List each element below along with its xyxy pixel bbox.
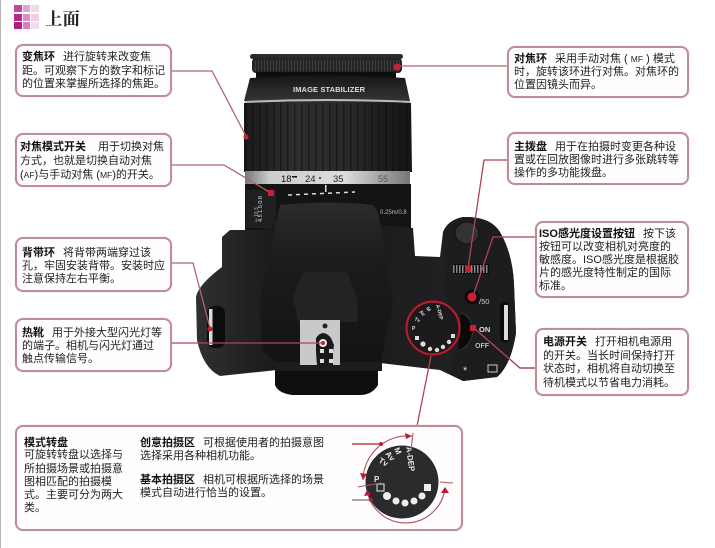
mode dial diagram: P	[374, 475, 380, 484]
panel: focus ring: 位置因镜头而异。	[514, 79, 602, 91]
mode dial diagram: A-DEP	[404, 446, 416, 473]
hot shoe	[300, 320, 340, 366]
eyepiece	[275, 362, 382, 395]
lens: 35	[333, 174, 344, 185]
mode dial on camera: P	[412, 326, 416, 332]
panel: power switch: 电源开关 打开相机电源用	[543, 336, 672, 348]
title: 上面	[45, 9, 80, 29]
text block: mode dial description: 模式转盘	[24, 437, 68, 449]
lens: 55	[378, 174, 388, 184]
text block: basic zone: 模式自动进行恰当的设置。	[140, 487, 272, 499]
dial disc	[366, 446, 438, 518]
leader line: focus ring	[394, 64, 507, 70]
panel: ISO button	[535, 221, 689, 298]
lens	[244, 54, 412, 232]
shutter and main dial: /50	[479, 297, 489, 306]
lens: ∞ 10 3	[254, 207, 260, 222]
text block: creative zone	[140, 436, 324, 462]
shutter and main dial: *	[463, 365, 468, 377]
panel: hot shoe	[15, 318, 172, 372]
bracket arcs and arrows	[358, 433, 453, 523]
panel: main dial	[507, 132, 689, 185]
panel: main dial: 主拨盘 用于在拍摄时变更各种设	[514, 141, 676, 153]
panel: zoom ring	[15, 44, 172, 97]
panel: ISO button: ISO感光度设置按钮 按下该	[539, 228, 676, 240]
text block: basic zone	[140, 474, 324, 499]
panel: focus mode switch: (AF)与手动对焦 (MF)的开关。	[20, 169, 160, 181]
lens: IMAGE STABILIZER	[293, 85, 366, 94]
shutter and main dial: OFF	[475, 343, 490, 350]
panel: ISO button: 片的感光度特性制定的国际	[539, 267, 671, 279]
panel: focus mode switch: 方式，也就是切换自动对焦	[20, 155, 152, 167]
panel: zoom ring: 的位置来掌握所选择的焦距。	[22, 78, 165, 90]
panel: strap mount: 孔，牢固安装背带。安装时应	[22, 260, 165, 272]
leader line: power switch	[470, 325, 535, 368]
text block: mode dial description: 式。主要可分为两大	[24, 489, 123, 501]
panel: hot shoe: 热靴 用于外接大型闪光灯等	[22, 327, 162, 339]
mode dial diagram: Av	[383, 450, 397, 463]
leader line: mode dial	[417, 356, 431, 426]
leader line: strap mount	[172, 263, 212, 332]
panel: main dial: 置或在回放图像时进行多张跳转等	[514, 154, 679, 166]
viewfinder prism	[260, 202, 393, 362]
icon: pink title grid	[14, 5, 39, 29]
panel: power switch: 状态时，相机将自动切换至	[543, 363, 675, 375]
panel: mode dial	[15, 425, 463, 531]
panel: power switch: 的开关。当长时间保持打开	[543, 350, 675, 362]
mode dial diagram: Tv	[377, 456, 390, 469]
lens: 0.25m/0.8	[380, 210, 407, 216]
mode dial on camera: A-DEP	[434, 304, 444, 321]
panel: strap mount: 注意保持左右平衡。	[22, 273, 121, 285]
text block: mode dial description	[24, 436, 123, 514]
lens: 4.5 1.5 0.8	[258, 196, 264, 222]
panel: focus ring: 对焦环 采用手动对焦 ( MF ) 模式	[514, 53, 675, 65]
panel: hot shoe: 触点传输信号。	[22, 353, 99, 365]
text block: mode dial description: 类。	[24, 502, 46, 514]
leader line: ISO button	[468, 237, 535, 302]
panel: focus ring: 时，旋转该环进行对焦。对焦环的	[514, 66, 679, 78]
panel: ISO button: 敏感度。ISO感光度是根据胶	[539, 254, 679, 266]
shutter and main dial	[207, 222, 509, 377]
mode dial on camera: Av	[418, 309, 426, 318]
mode dial on camera	[405, 300, 461, 356]
panel: main dial: 操作的多功能拨盘。	[514, 167, 613, 179]
panel: power switch	[535, 328, 689, 396]
panel: ISO button: 按钮可以改变相机对亮度的	[539, 241, 671, 253]
leader line: focus mode switch	[172, 165, 274, 196]
mode dial diagram: M	[392, 446, 403, 456]
text block: mode dial description: 所拍摄场景或拍摄意	[24, 463, 123, 475]
panel: ISO button: 标准。	[539, 280, 572, 292]
text block: creative zone: 创意拍摄区 可根据使用者的拍摄意图	[140, 437, 324, 449]
leader line: main dial	[465, 160, 507, 272]
camera body	[196, 217, 516, 381]
lens: 24	[305, 174, 316, 185]
panel: focus mode switch	[15, 133, 172, 187]
panel: strap mount	[15, 237, 172, 292]
panel: zoom ring: 变焦环 进行旋转来改变焦	[22, 51, 151, 63]
mode dial on camera: M	[424, 306, 432, 313]
text block: basic zone: 基本拍摄区 相机可根据所选择的场景	[140, 474, 324, 486]
text block: mode dial description: 图相匹配的拍摄模	[24, 476, 112, 488]
text block: creative zone: 选择采用各种相机功能。	[140, 450, 261, 462]
panel: hot shoe: 的端子。相机与闪光灯通过	[22, 340, 154, 352]
text block: mode dial description: 可旋转转盘以选择与	[24, 449, 123, 461]
leader line: hot shoe	[172, 342, 323, 344]
leader line: zoom ring	[172, 71, 248, 140]
panel: focus ring	[507, 46, 689, 98]
panel: focus mode switch: 对焦模式开关 用于切换对焦	[20, 141, 164, 153]
mode dial on camera: Tv	[413, 316, 421, 324]
panel: power switch: 待机模式以节省电力消耗。	[543, 377, 675, 389]
panel: strap mount: 背带环 将背带两端穿过该	[22, 247, 151, 259]
lens: 18	[281, 174, 292, 185]
shutter and main dial: ON	[479, 325, 490, 334]
panel: zoom ring: 距。可观察下方的数字和标记	[22, 65, 165, 77]
